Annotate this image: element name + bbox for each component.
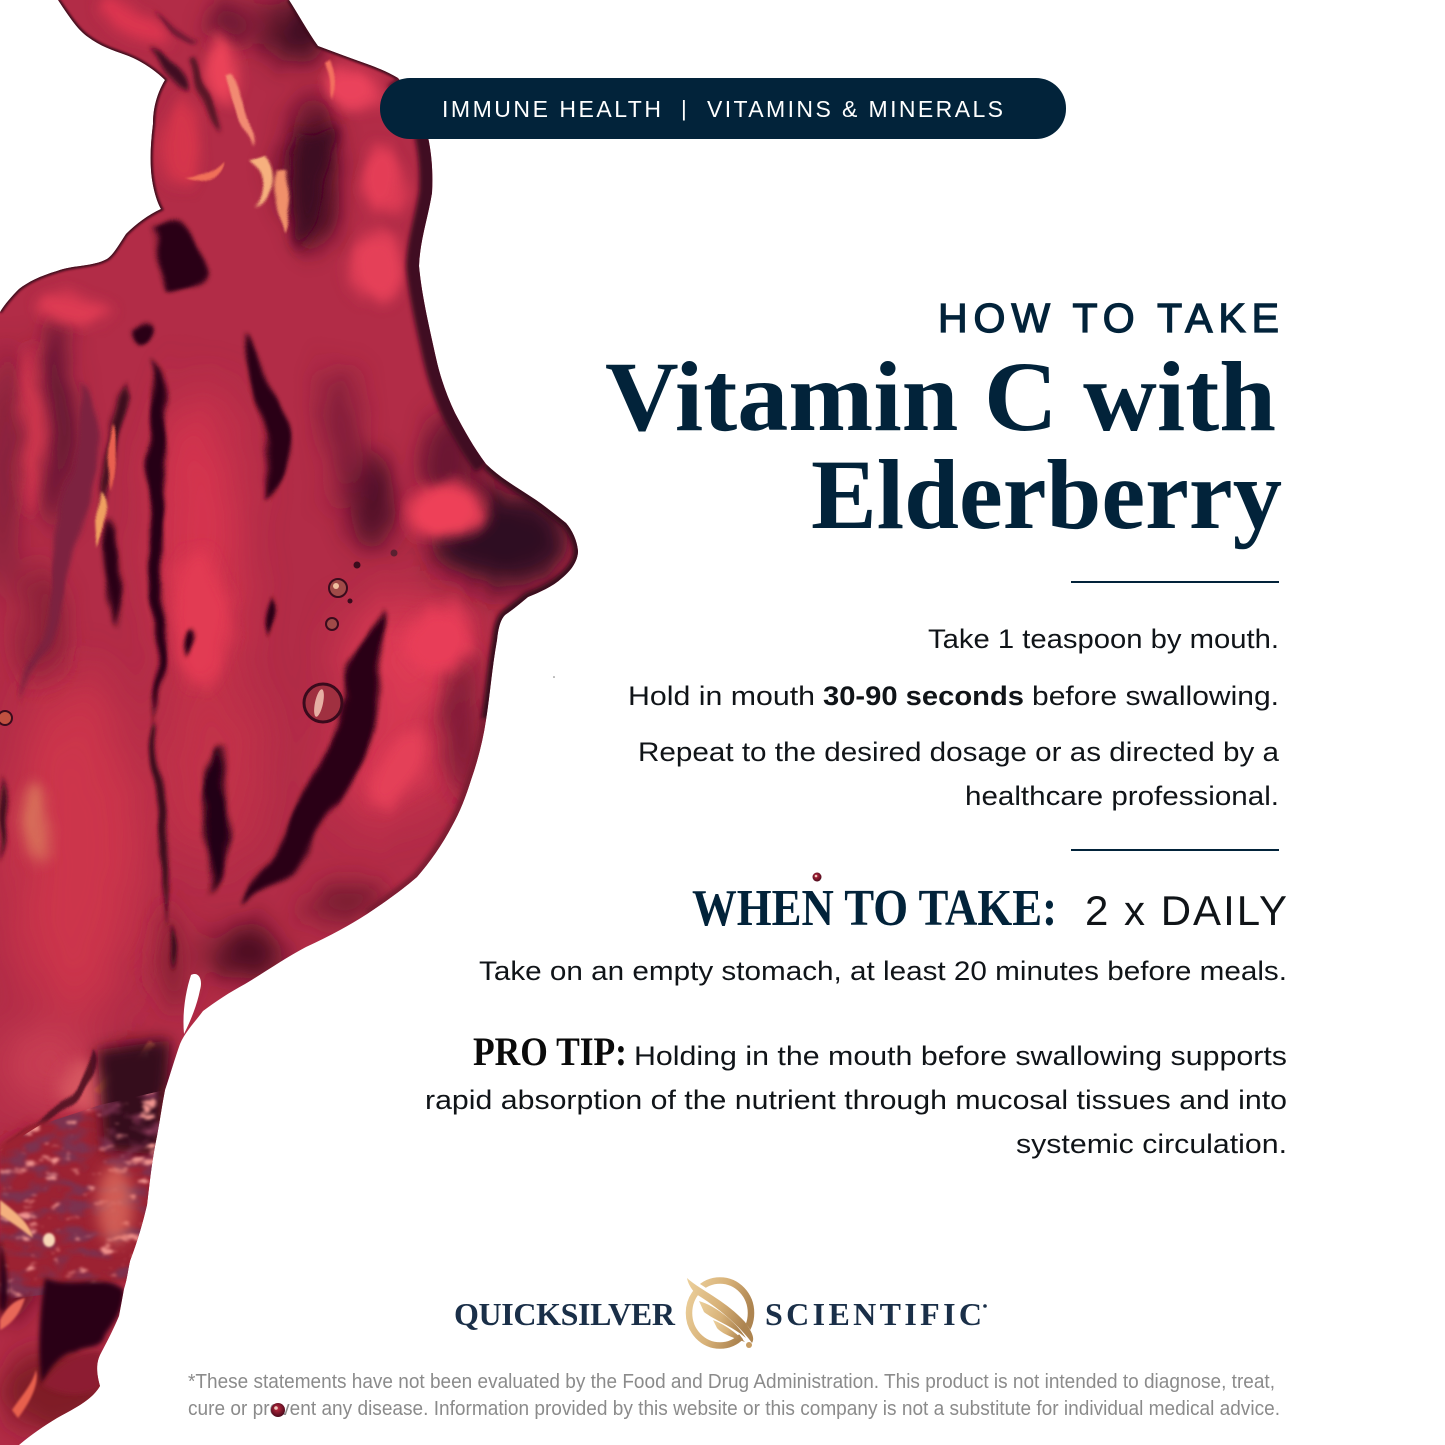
directions text	[628, 624, 1280, 811]
brand logo: SCIENTIFIC	[765, 1296, 982, 1332]
white highlight on splash	[183, 974, 201, 1034]
disclaimer: *These statements have not been evaluated by the Food and Drug Administration. This product is not intended to diagnose, treat,	[188, 1371, 1275, 1393]
bubbles	[0, 550, 398, 725]
eyebrow heading: HOW TO TAKE	[938, 295, 1279, 341]
brand logo	[454, 1276, 987, 1348]
stray droplet	[812, 872, 822, 882]
pro tip	[425, 1029, 1287, 1159]
directions text: before swallowing.	[1032, 681, 1279, 711]
directions text: Hold in mouth	[628, 681, 815, 711]
category pill: |	[681, 96, 687, 121]
main title: Vitamin C with	[605, 341, 1276, 452]
pro tip: Holding in the mouth before swallowing supports	[634, 1041, 1287, 1071]
lower ripples	[0, 1040, 170, 1418]
brand logo: QUICKSILVER	[454, 1296, 676, 1332]
directions text: 30-90 seconds	[823, 681, 1024, 711]
upper dark fold	[290, 125, 335, 250]
orange highlights	[257, 155, 279, 208]
category pill	[380, 78, 1066, 139]
stray droplet on disclaimer	[271, 1403, 285, 1417]
broad dark zones	[425, 490, 565, 590]
liquid streaks	[243, 330, 286, 500]
bright glows	[403, 485, 487, 545]
category pill: VITAMINS & MINERALS	[707, 96, 1003, 122]
icon: gold feather ring	[686, 1276, 755, 1348]
when to take: 2 x DAILY	[1085, 887, 1287, 934]
category pill: IMMUNE HEALTH	[442, 96, 661, 122]
directions text: healthcare professional.	[965, 781, 1279, 811]
pro tip: systemic circulation.	[1016, 1129, 1287, 1159]
when to take: WHEN TO TAKE:	[692, 880, 1057, 937]
elderberry liquid splash	[0, 0, 600, 1445]
main title: Elderberry	[811, 439, 1282, 550]
main title	[605, 341, 1282, 550]
pro tip: PRO TIP:	[473, 1029, 627, 1074]
directions text: Take 1 teaspoon by mouth.	[928, 624, 1279, 654]
disclaimer: cure or prevent any disease. Information provided by this website or this company is not a substitute for individual medical advice.	[188, 1398, 1280, 1420]
directions text: Repeat to the desired dosage or as directed by a	[638, 737, 1280, 767]
pro tip: rapid absorption of the nutrient through mucosal tissues and into	[425, 1085, 1287, 1115]
disclaimer	[188, 1371, 1280, 1420]
dark rim of the splash	[0, 0, 165, 312]
timing note: Take on an empty stomach, at least 20 minutes before meals.	[479, 956, 1287, 986]
